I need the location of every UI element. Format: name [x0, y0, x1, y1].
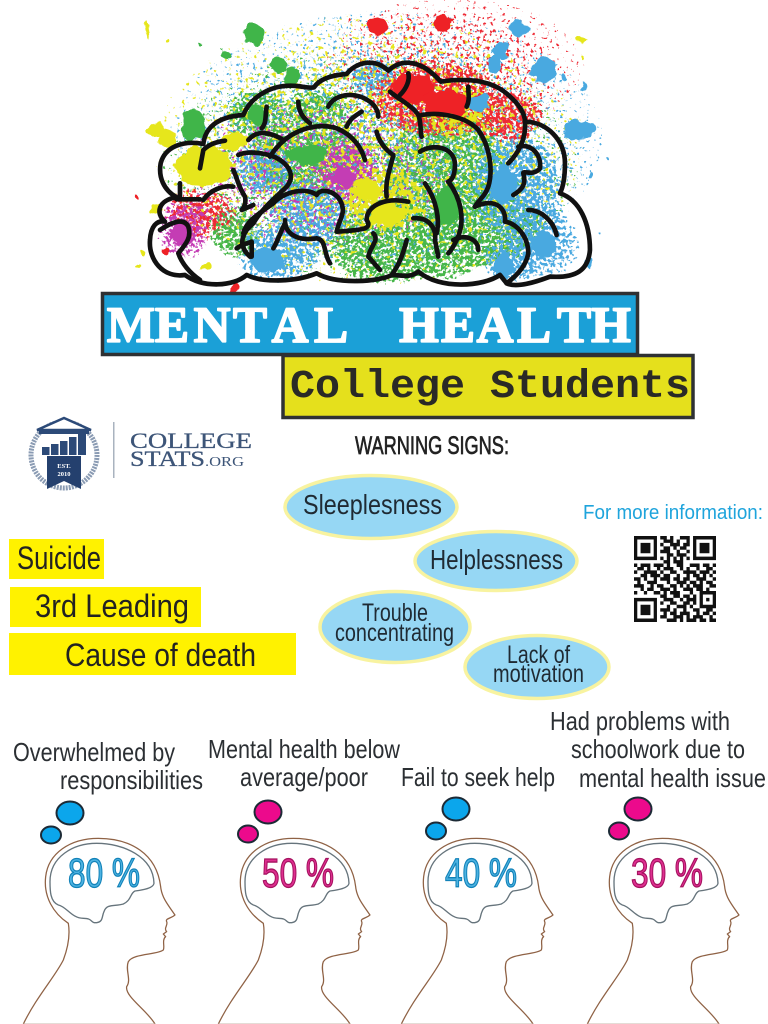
subtitle banner: College Students — [283, 356, 693, 418]
logo seal: EST. — [57, 463, 71, 470]
brain outline — [150, 63, 590, 285]
percent: 30 % — [631, 850, 703, 896]
icon: head profile — [218, 838, 370, 1024]
solid paint blobs — [135, 14, 612, 294]
stat label: average/poor — [240, 762, 368, 792]
percent: 40 % — [445, 850, 517, 896]
percent: 50 % — [262, 850, 334, 896]
stat label: Fail to seek help — [401, 762, 555, 792]
stat label: Overwhelmed by — [13, 737, 175, 767]
warning sign: trouble concentrating: concentrating — [335, 619, 454, 647]
paint speckle: magenta — [153, 97, 460, 263]
callout line: cause of death — [9, 633, 296, 675]
stat label: responsibilities — [60, 765, 203, 795]
stat 1: overwhelmed — [13, 737, 203, 1024]
icon: head profile — [587, 838, 739, 1024]
stat label: Had problems with — [550, 706, 730, 736]
brain splatter illustration — [135, 0, 612, 294]
stat 2: mental health below average — [208, 734, 400, 1024]
stat label — [13, 737, 203, 795]
icon: thought bubbles — [426, 798, 470, 840]
title banner: Mental Health: MENTALHEALTH — [107, 298, 631, 354]
paint speckle: red — [160, 0, 587, 243]
icon: thought bubbles — [41, 802, 84, 844]
QR code — [634, 538, 716, 620]
warning sign: sleeplesness: Sleeplesness — [303, 489, 442, 520]
logo wordmark: COLLEGE — [130, 428, 252, 453]
heading: warning signs: WARNING SIGNS: — [355, 432, 509, 460]
logo wordmark: STATS — [130, 446, 205, 471]
warning sign: lack of motivation — [465, 636, 609, 698]
logo wordmark: .ORG — [205, 455, 244, 470]
paint speckle: green — [157, 47, 583, 287]
callout: suicide 3rd leading cause of death — [9, 539, 296, 675]
callout line: 3rd leading: 3rd Leading — [35, 588, 189, 624]
stat label — [550, 706, 766, 793]
logo seal: 2010 — [58, 471, 70, 478]
stat label: Mental health below — [208, 734, 400, 764]
callout line: suicide: Suicide — [17, 540, 101, 576]
stat label — [208, 734, 400, 792]
logo: CollegeStats.org — [31, 418, 252, 489]
paint speckle: yellow — [150, 10, 590, 290]
percent: 80 % — [68, 850, 140, 896]
stat 3: fail to seek help — [401, 762, 555, 1024]
logo wordmark — [130, 428, 252, 471]
paint speckle: blue — [167, 7, 607, 287]
callout line: cause of death: Cause of death — [65, 637, 256, 673]
warning sign: sleeplesness — [285, 476, 457, 538]
warning sign: helplessness: Helplessness — [430, 544, 563, 575]
warning sign: trouble concentrating: Trouble — [362, 599, 428, 627]
warning sign: trouble concentrating — [320, 592, 470, 662]
stat 4: problems with schoolwork — [550, 706, 766, 1024]
icon: thought bubbles — [238, 800, 282, 842]
warning sign: helplessness — [415, 532, 577, 590]
icon: head profile — [401, 838, 553, 1024]
icon: thought bubbles — [609, 798, 652, 840]
icon: head profile — [23, 838, 175, 1024]
logo seal — [31, 418, 97, 489]
subtitle banner: College Students: College Students — [290, 365, 690, 410]
warning sign: lack of motivation: motivation — [493, 660, 584, 688]
warning sign: lack of motivation: Lack of — [507, 641, 570, 669]
